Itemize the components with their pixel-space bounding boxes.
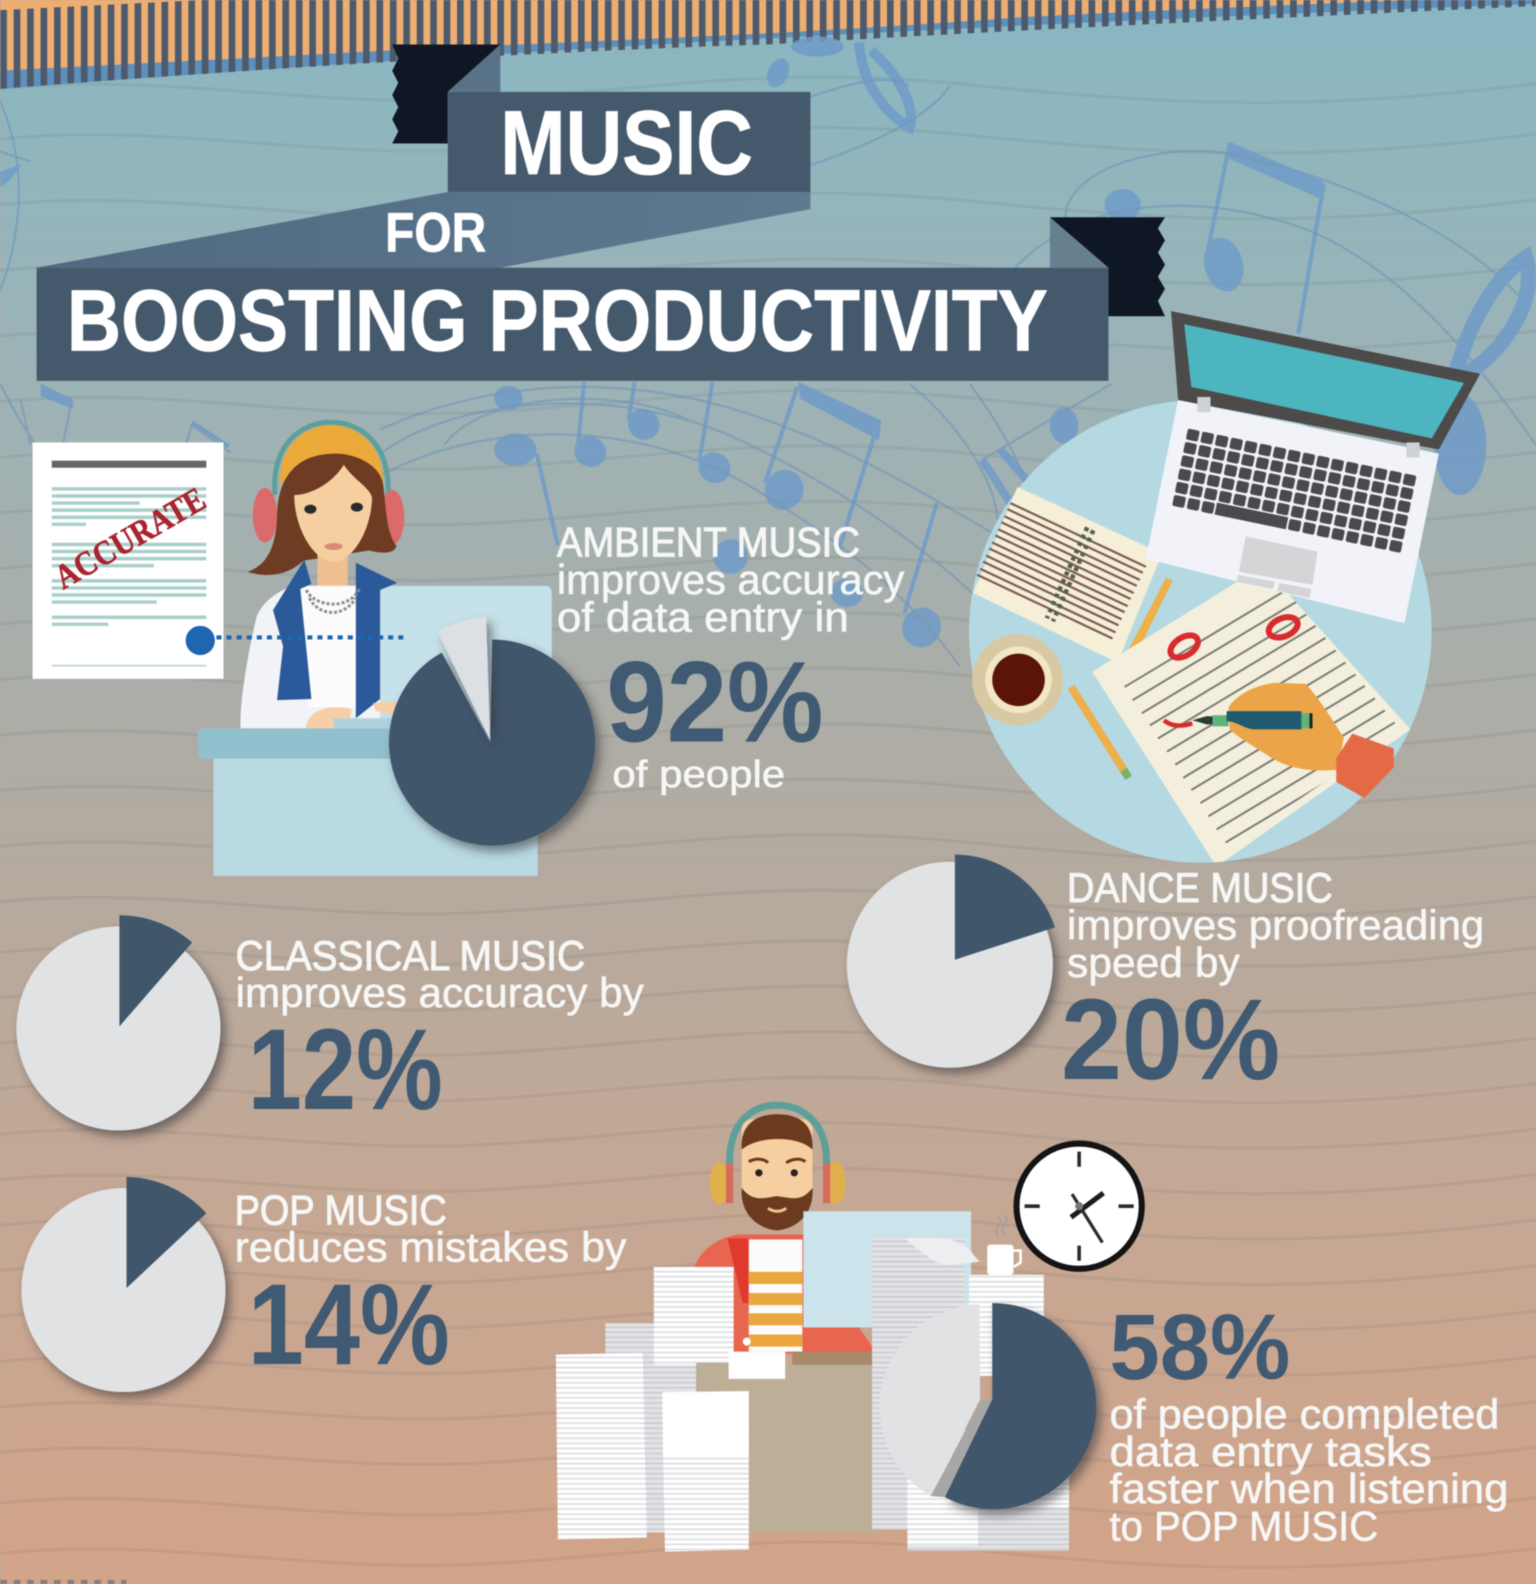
shirt xyxy=(301,586,360,707)
hair xyxy=(742,1114,813,1150)
back paper stack xyxy=(605,1323,696,1532)
desk body xyxy=(213,759,538,876)
eyes xyxy=(755,1169,763,1176)
head xyxy=(742,1119,812,1205)
pie chart: classical music 12% xyxy=(16,915,220,1130)
wall clock xyxy=(1017,1144,1142,1269)
stat: 20%: 20% xyxy=(1061,976,1280,1104)
monitor xyxy=(380,586,552,737)
orange ruler xyxy=(1121,578,1173,668)
text: classical music: improves accuracy by xyxy=(236,970,644,1016)
note cluster: top centre clef xyxy=(667,36,950,192)
heading: FOR: FOR xyxy=(385,202,486,264)
pie chart: ambient music 92% xyxy=(389,616,595,846)
left tape xyxy=(392,44,500,143)
front left stack xyxy=(556,1353,647,1540)
table circle xyxy=(969,400,1432,863)
top band: orange strip with comb stripes xyxy=(0,0,1536,89)
red correction squiggle xyxy=(1164,720,1192,726)
pencil xyxy=(1071,687,1129,778)
text: 58% of people: of people completed xyxy=(1109,1391,1499,1437)
text: pop music: POP MUSIC xyxy=(235,1187,447,1233)
music bar xyxy=(448,92,810,192)
note cluster: left edge xyxy=(0,101,231,505)
stat: 92%: 92% xyxy=(606,638,824,766)
text: ambient music: AMBIENT MUSIC xyxy=(557,520,860,566)
pie chart: dance music 20% xyxy=(847,855,1055,1068)
text: dance music: improves proofreading xyxy=(1067,902,1484,948)
stat: 58%: 58% xyxy=(1109,1295,1290,1399)
note cluster: behind table circle xyxy=(909,384,1111,606)
text: dance music xyxy=(1061,865,1484,1104)
front stack with blank top xyxy=(662,1391,749,1552)
pie chart: 58% faster xyxy=(880,1303,1096,1509)
notebook xyxy=(973,487,1162,663)
note cluster: centre notes behind ambient text xyxy=(380,382,1051,667)
headband xyxy=(275,422,388,495)
red lip marks xyxy=(1167,631,1202,662)
curled paper xyxy=(904,1238,985,1265)
pen xyxy=(1192,711,1312,729)
text: ambient music: improves accuracy xyxy=(557,557,905,603)
upper fold xyxy=(448,44,500,92)
text: ambient music xyxy=(557,520,905,796)
desk top xyxy=(198,728,542,759)
beard xyxy=(742,1188,813,1230)
body jacket xyxy=(694,1234,877,1354)
background music notes xyxy=(0,36,1536,667)
bottom comb strip xyxy=(0,1580,127,1584)
hand xyxy=(1229,683,1344,770)
stat: 12%: 12% xyxy=(248,1006,443,1134)
tall grey stack xyxy=(872,1236,965,1529)
title ribbon xyxy=(37,44,1165,381)
text: dance music: DANCE MUSIC xyxy=(1067,865,1333,911)
woman with headphones at desk xyxy=(198,422,552,876)
paper stack behind desk xyxy=(654,1267,734,1365)
hands xyxy=(306,707,352,728)
diagonal band xyxy=(37,192,810,268)
coffee cup xyxy=(972,634,1063,725)
text: 58% of people: faster when listening xyxy=(1109,1466,1508,1512)
neck xyxy=(317,551,348,593)
text: classical music: CLASSICAL MUSIC xyxy=(236,933,585,979)
hair xyxy=(248,454,396,575)
face xyxy=(294,465,372,562)
lips xyxy=(325,543,343,550)
jacket pocket dot xyxy=(743,1338,751,1346)
sleeve cuff xyxy=(1338,735,1392,796)
stat: 14%: 14% xyxy=(248,1261,450,1389)
jacket xyxy=(240,586,380,728)
text: 58% of people: to POP MUSIC xyxy=(1109,1504,1378,1550)
text: pop music: reduces mistakes by xyxy=(235,1225,627,1271)
headphones xyxy=(730,1105,827,1203)
paper on desk xyxy=(729,1352,785,1379)
note cluster: top right beamed notes and clef xyxy=(1010,141,1536,495)
text: 58% of people: data entry tasks xyxy=(1109,1429,1432,1475)
text: 58% of people xyxy=(1109,1295,1508,1550)
coffee mug with steam xyxy=(987,1215,1021,1275)
right tape xyxy=(1050,217,1165,316)
lower fold xyxy=(1050,217,1108,268)
striped shirt xyxy=(749,1240,802,1352)
text: ambient music: of data entry in xyxy=(557,594,849,640)
illustration: round table with laptop, notebook, coffee and proofreading xyxy=(969,311,1480,867)
right paper stack xyxy=(969,1275,1044,1376)
heading: BOOSTING PRODUCTIVITY: BOOSTING PRODUCTIVITY xyxy=(67,273,1048,370)
text: pop music xyxy=(235,1187,627,1389)
pie chart: pop music 14% xyxy=(21,1177,226,1392)
mouth xyxy=(768,1208,786,1211)
necklace xyxy=(306,588,360,612)
keyboard xyxy=(334,718,392,728)
man with headphones at desk among paper stacks xyxy=(556,1105,1069,1552)
desk xyxy=(696,1363,882,1532)
connector dot and dotted line xyxy=(186,626,404,655)
text: ambient music: of people xyxy=(612,753,785,796)
monitor xyxy=(803,1211,971,1327)
eyes xyxy=(304,505,316,514)
ear pads xyxy=(253,488,277,542)
heading: MUSIC: MUSIC xyxy=(500,93,753,194)
text: classical music xyxy=(236,933,644,1134)
vest xyxy=(273,560,311,700)
stamp text: ACCURATE xyxy=(48,480,212,597)
document with accurate stamp xyxy=(33,442,224,679)
proof sheet xyxy=(1092,582,1410,863)
text: dance music: speed by xyxy=(1067,940,1240,986)
laptop xyxy=(1146,311,1480,623)
bottom bar xyxy=(37,268,1108,381)
lower right stacks xyxy=(907,1480,1069,1551)
